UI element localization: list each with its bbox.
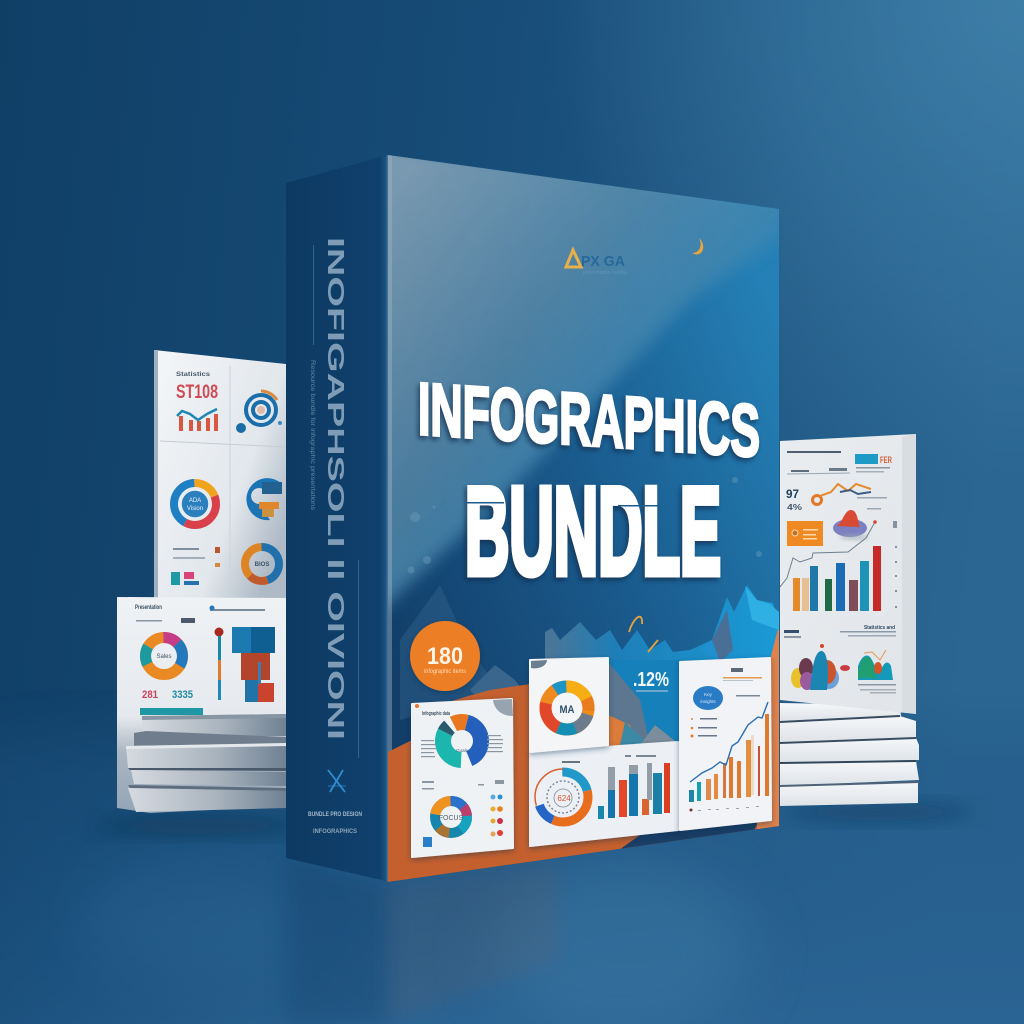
mini bar and line chart (177, 409, 218, 431)
left front sheet (117, 597, 286, 813)
donut chart: top card (546, 686, 588, 730)
stacked block chart (232, 627, 275, 702)
orange callout box (787, 521, 823, 546)
bullet list (690, 718, 717, 738)
left front sheet: 281 (142, 689, 158, 701)
cover title: INFOGRAPHICS (418, 367, 760, 473)
cover title: BUNDLE (465, 463, 721, 601)
right stacked sheets and books (780, 434, 919, 806)
percentage label: .12% (633, 669, 669, 691)
large blue yellow red donut (174, 483, 216, 525)
heading: statistic: Statistics (176, 372, 211, 378)
orange badge: infographic items (424, 669, 466, 675)
spine publisher text: BUNDLE PRO DESIGN (308, 812, 362, 818)
donut chart: multi colour (435, 801, 467, 833)
small legend (171, 547, 220, 585)
brand logo: presentation bundle (583, 270, 627, 276)
dark distant peaks (400, 586, 487, 720)
legend dots (490, 794, 503, 836)
x axis labels (690, 806, 759, 812)
vertical pin chart (214, 628, 224, 700)
panel: lower left card (412, 699, 513, 857)
hump chart (833, 510, 868, 540)
panel: donut card (530, 658, 608, 752)
donut chart: teal blue (443, 722, 481, 760)
right book stack (780, 703, 919, 806)
title fold line (466, 502, 660, 506)
ring chart: wide card (535, 769, 591, 825)
left back sheet: Vision (187, 506, 203, 512)
left back sheet: ST108 (176, 382, 218, 403)
blue bubble label: insights (700, 699, 716, 704)
orange badge: 180 (427, 643, 463, 670)
left stacked sheets and books (117, 350, 286, 813)
blue tag with label (855, 454, 878, 464)
panel: lower left card: Goals (456, 748, 469, 753)
growth bars (689, 714, 769, 802)
teal mountain chart (858, 650, 896, 694)
right sheet (780, 434, 916, 714)
left back sheet (154, 350, 286, 600)
bar chart: wide card (562, 755, 670, 819)
icon: spine X logo (328, 770, 346, 792)
decorative bubbles (408, 477, 762, 574)
blue mountain art (545, 585, 779, 745)
left front sheet: 3335 (172, 689, 193, 701)
orange pink blue donut (146, 638, 182, 674)
dark figures: 97 (786, 487, 799, 501)
spine small rotated text: Resource bundle for infographic presentations (309, 360, 315, 510)
growth trend line (690, 702, 768, 782)
box spine: INFOGRAPHICS (313, 829, 357, 835)
spine vertical title: INOFIGAPHSOLI II OIVIONI (323, 237, 349, 740)
bar chart with trend line (780, 520, 881, 611)
orange line chart (812, 484, 887, 510)
target ring chart (236, 391, 282, 433)
blue partial donut (246, 478, 282, 520)
panel: growth chart card (680, 658, 771, 830)
orange badge (410, 621, 480, 691)
donut center label: MA (560, 704, 575, 716)
ring chart: wide card: 624 (557, 794, 571, 803)
left front sheet: Presentation (135, 605, 162, 611)
left front sheet: Sales (156, 654, 172, 660)
box spine (286, 155, 390, 882)
left back sheet: ADA (189, 498, 201, 504)
left book stack (126, 714, 286, 812)
left back sheet: BIOS (255, 562, 269, 568)
gold swoosh accents (629, 617, 658, 652)
lower text block: Statistics and (864, 625, 895, 631)
cover title (415, 382, 760, 584)
orange blue donut (245, 547, 279, 581)
diagonal sheen (388, 155, 779, 610)
blue bubble label: Key (704, 692, 713, 697)
box front cover (388, 155, 779, 882)
panel: wide chart card (530, 742, 678, 846)
panel: lower left card: FOCUS (439, 815, 464, 822)
colorful blob chart (791, 644, 850, 690)
chart axis ticks (893, 521, 897, 608)
brand logo (566, 250, 627, 276)
card text lines (421, 735, 504, 790)
orange ground art (388, 684, 779, 882)
right sheet: 4% (787, 503, 802, 512)
icon: crescent moon (692, 238, 703, 254)
panel: lower left card: Infographic data (422, 711, 450, 717)
right sheet: FER (880, 455, 892, 465)
brand logo: PX GA (581, 253, 625, 270)
blue bubble label (693, 686, 723, 710)
